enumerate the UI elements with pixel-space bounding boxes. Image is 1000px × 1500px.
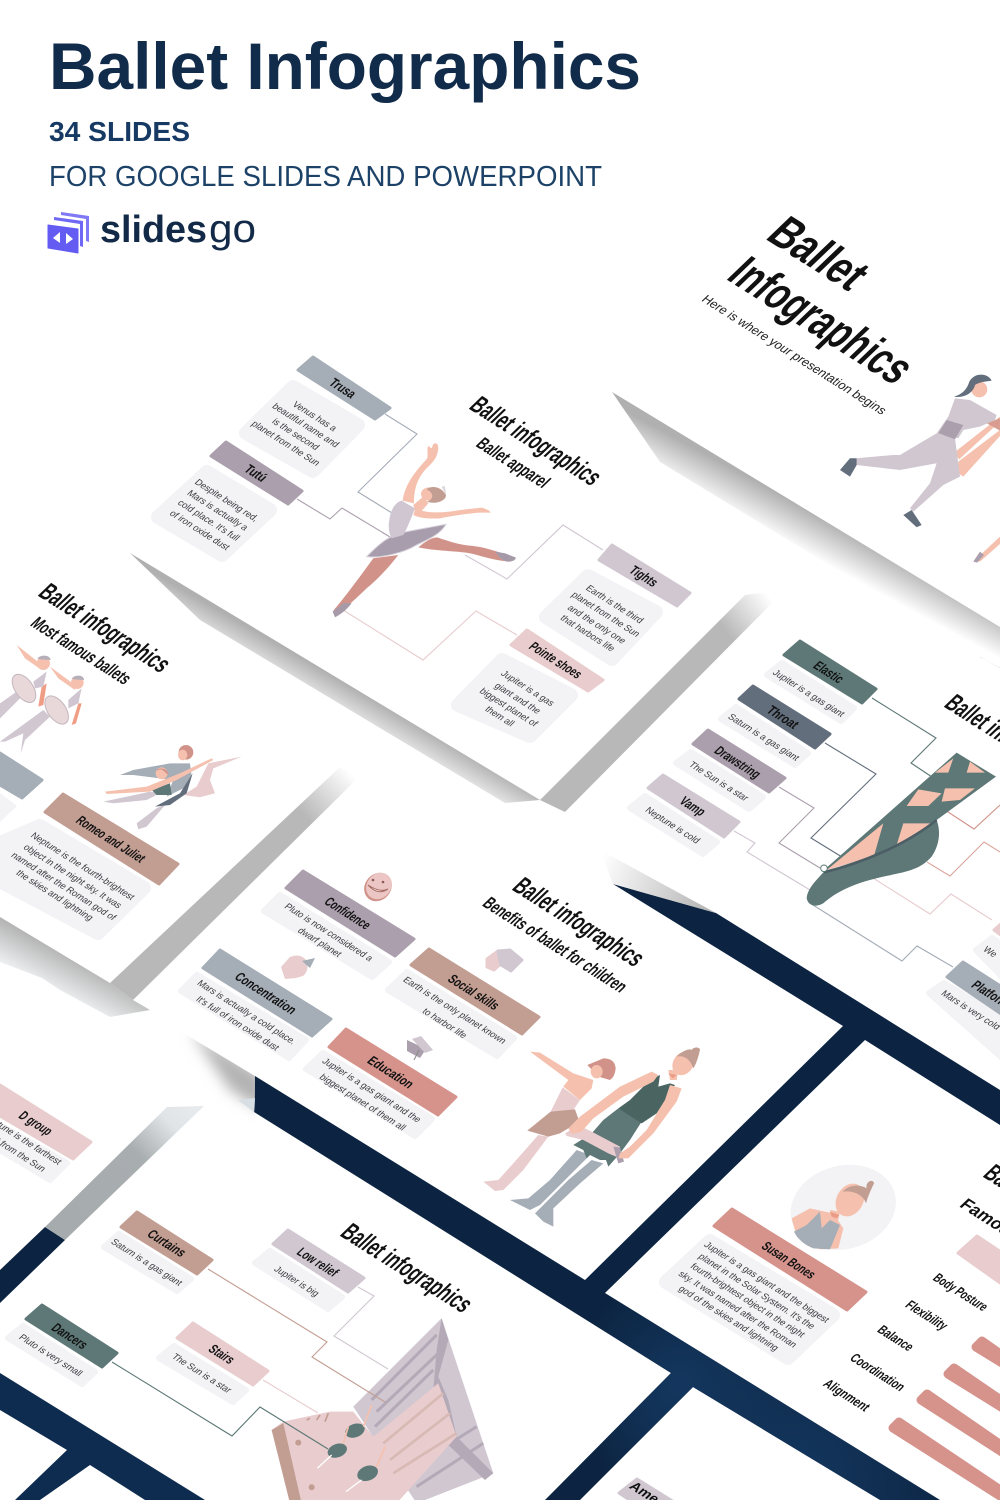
chart: skills bars bbox=[820, 1236, 1000, 1500]
panel: most famous ballets slide bbox=[0, 579, 242, 933]
card: Throat: Saturn is a gas giant bbox=[726, 712, 802, 763]
navy background bands between slides bbox=[0, 628, 1000, 1500]
card: Tutu: Despite being red, bbox=[192, 477, 261, 523]
card: Tutu bbox=[158, 442, 302, 555]
slide title: Ballet infographics bbox=[464, 392, 609, 490]
card: Susan Bones bbox=[666, 1209, 866, 1358]
card: D group (cropped slide): D group bbox=[15, 1108, 57, 1138]
card: Tutu: Mars is actually a bbox=[185, 488, 251, 533]
portrait bbox=[781, 1153, 906, 1261]
card: Romeo and Juliet: object in the night sky. It was bbox=[21, 842, 125, 910]
panel: stage slide bbox=[8, 1212, 493, 1500]
illustration: child and teacher bbox=[483, 1047, 700, 1227]
card: cropped grey bbox=[0, 753, 42, 822]
card: Concentration bbox=[181, 950, 331, 1058]
card: Platform (cropped) bbox=[929, 962, 1000, 1065]
icon: graduation cap bbox=[407, 1036, 433, 1060]
card: Susan Bones: Susan Bones bbox=[758, 1239, 820, 1281]
slide subtitle: Most famous ballets bbox=[26, 614, 136, 689]
connector lines bbox=[112, 1269, 388, 1449]
card: Concentration: Concentration bbox=[232, 969, 301, 1017]
subtitle: FOR GOOGLE SLIDES AND POWERPOINT bbox=[49, 161, 602, 193]
card: Drawstring bbox=[676, 730, 785, 809]
card: Curtains: Saturn is a gas giant bbox=[109, 1237, 185, 1288]
card: Concentration: Mars is actually a cold place. bbox=[195, 978, 298, 1046]
card: Romeo and Juliet bbox=[0, 794, 178, 933]
panel: benefits of ballet slide bbox=[181, 867, 700, 1227]
slide shadows and page curls bbox=[0, 392, 1000, 1240]
title: Ballet Infographics bbox=[49, 29, 641, 103]
card: cropped tab bottom slide bbox=[619, 1478, 690, 1500]
card: Stairs: The Sun is a star bbox=[170, 1352, 234, 1395]
card: We (cropped): We bbox=[981, 945, 1000, 959]
panel: title slide bbox=[699, 207, 1000, 563]
connector lines bbox=[734, 698, 1000, 967]
chart: skills bars: Coordination bbox=[847, 1350, 909, 1394]
panel: ballet apparel slide bbox=[158, 357, 690, 736]
card: Education: Education bbox=[364, 1053, 418, 1091]
illustration: stage bbox=[272, 1318, 493, 1500]
slide tagline: Here is where your presentation begins bbox=[699, 292, 891, 417]
card: Trusa: beautiful name and bbox=[270, 401, 341, 449]
card: Tutu: cold place. It's full bbox=[175, 498, 242, 543]
panel: Susan Bones slide bbox=[666, 1153, 1000, 1500]
slide title bbox=[717, 207, 926, 393]
card: Vamp: Vamp bbox=[676, 794, 710, 818]
card: Curtains bbox=[104, 1212, 212, 1291]
card: Pointe shoes: giant and the bbox=[492, 681, 543, 716]
card: Tights: Earth is the third bbox=[584, 583, 646, 625]
illustration: couple bbox=[103, 745, 242, 829]
slide title: Ballet infographics bbox=[335, 1219, 480, 1317]
card: Tights: planet from the Sun bbox=[569, 590, 642, 639]
slide count: 34 SLIDES bbox=[49, 116, 190, 147]
slide title: Ballet bbox=[756, 207, 881, 300]
card: Dancers: Pluto is very small bbox=[17, 1333, 85, 1378]
card: Throat bbox=[721, 686, 830, 765]
card: Susan Bones: planet in the Solar System. It's the bbox=[696, 1252, 817, 1331]
chart: skills bars: Balance bbox=[874, 1322, 918, 1354]
card: Romeo and Juliet: Romeo and Juliet bbox=[73, 813, 149, 865]
card: Drawstring: The Sun is a star bbox=[687, 760, 751, 803]
card: Elastic: Jupiter is a gas giant bbox=[771, 668, 847, 719]
card: We (cropped) bbox=[976, 922, 1000, 985]
card: Tights bbox=[546, 545, 690, 659]
card: Dancers: Dancers bbox=[48, 1320, 92, 1352]
illustration: ballerina bbox=[333, 443, 516, 617]
card: Social skills: Social skills bbox=[445, 971, 504, 1013]
card: Drawstring: Drawstring bbox=[711, 743, 765, 781]
card: Trusa: planet from the Sun bbox=[249, 419, 322, 468]
card: Social skills bbox=[388, 949, 539, 1056]
icon: head with bow bbox=[281, 956, 315, 979]
card: Tutu: of iron oxide dust bbox=[167, 509, 232, 552]
icon: speech bubbles bbox=[487, 950, 522, 971]
card: Susan Bones: god of the skies and lightning bbox=[676, 1284, 781, 1353]
card: Trusa: is the second bbox=[270, 417, 322, 452]
card: Elastic: Elastic bbox=[810, 658, 848, 686]
card: Education: Jupiter is a gas giant and the bbox=[320, 1056, 423, 1124]
card: Trusa: Trusa bbox=[326, 375, 360, 401]
card: Elastic bbox=[767, 641, 876, 721]
card: Confidence: Pluto is now considered a bbox=[282, 902, 376, 963]
slide title: Ballet infographics bbox=[507, 873, 652, 971]
logo: slidesgo: slides bbox=[100, 209, 207, 251]
card: Tutu: Tutú bbox=[241, 462, 271, 484]
card: Stairs: Stairs bbox=[205, 1342, 239, 1367]
card: Education: biggest planet of them all bbox=[317, 1072, 408, 1132]
card: Susan Bones: sky. It was named after the Roman bbox=[676, 1269, 799, 1349]
connector lines bbox=[297, 414, 603, 660]
slide subtitle: Benefits of ballet for children bbox=[478, 894, 632, 996]
card: Vamp bbox=[630, 775, 739, 854]
card: Social skills: Earth is the only planet known bbox=[401, 975, 509, 1046]
card: Confidence: Confidence bbox=[321, 894, 375, 932]
slide subtitle: Ballet apparel bbox=[471, 435, 554, 492]
chart: skills bars: Flexibility bbox=[902, 1297, 952, 1333]
panel: ballet shoe slide bbox=[630, 641, 1000, 1065]
card: Pointe shoes: Jupiter is a gas bbox=[499, 669, 557, 708]
logo: slidesgo: go bbox=[209, 207, 256, 251]
card: Susan Bones: fourth-brightest object in the night bbox=[688, 1261, 808, 1339]
card: Pointe shoes: Pointe shoes bbox=[526, 639, 586, 681]
icon: smiley bbox=[358, 867, 398, 907]
card: Low relief: Low relief bbox=[294, 1245, 343, 1279]
card: Education bbox=[306, 1029, 456, 1136]
chart: skills bars: Alignment bbox=[820, 1376, 874, 1414]
card: Romeo and Juliet: named after the Roman god of bbox=[9, 850, 119, 922]
logo: slidesgo bbox=[48, 207, 256, 253]
card: D group (cropped slide) bbox=[0, 1085, 91, 1180]
card: Pointe shoes: biggest planet of bbox=[477, 686, 540, 728]
card: Low relief bbox=[255, 1230, 364, 1309]
illustration: dancers bbox=[840, 375, 1000, 563]
card: Dancers bbox=[8, 1305, 117, 1384]
card: Concentration: It's full of iron oxide dust bbox=[194, 994, 282, 1052]
card: Tights: that harbors life bbox=[558, 613, 617, 653]
card: Curtains: Curtains bbox=[144, 1227, 190, 1260]
card: Vamp: Neptune is cold bbox=[643, 805, 702, 845]
card: Pointe shoes: them all bbox=[483, 704, 517, 728]
illustration: two swans bbox=[0, 645, 84, 753]
card: Confidence: dwarf planet bbox=[296, 926, 344, 959]
card: Trusa: Venus has a bbox=[290, 400, 340, 433]
card: Romeo and Juliet: the skies and lightning bbox=[14, 868, 96, 922]
card: Trusa bbox=[246, 357, 390, 471]
card: Pointe shoes bbox=[458, 630, 603, 736]
slide title: Ballet infographics bbox=[33, 579, 178, 677]
card: Social skills: to harbor life bbox=[420, 1006, 469, 1040]
card: Confidence bbox=[264, 871, 414, 977]
illustration: pointe shoe bbox=[807, 753, 996, 906]
card: Throat: Throat bbox=[763, 703, 803, 731]
card: Romeo and Juliet: Neptune is the fourth-brightest bbox=[28, 831, 137, 902]
card: Susan Bones: Jupiter is a gas giant and the biggest bbox=[702, 1240, 832, 1325]
card: Tights: Tights bbox=[626, 563, 662, 589]
card: Tights: and the only one bbox=[565, 603, 628, 645]
card: Low relief: Jupiter is big bbox=[272, 1264, 322, 1298]
card: Stairs bbox=[159, 1323, 268, 1402]
